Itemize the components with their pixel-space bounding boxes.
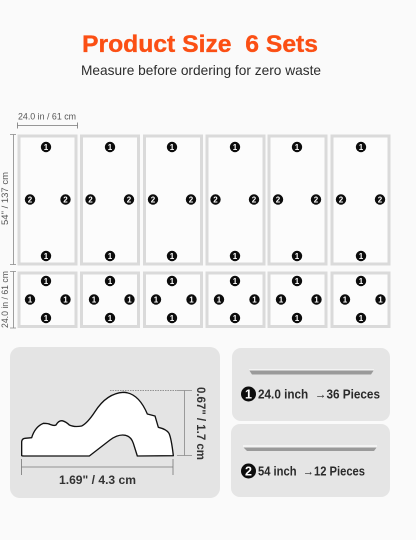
tall frame badges: 1 xyxy=(170,143,175,152)
short frame badges: 1 xyxy=(28,295,33,304)
tall frame badges: 1 xyxy=(295,252,300,261)
short frames row xyxy=(19,273,389,326)
tall frame badges: 2 xyxy=(127,195,132,204)
short frame badges: 1 xyxy=(63,295,68,304)
width dimension: 24.0 in / 61 cm xyxy=(18,112,78,128)
tall frame badges: 2 xyxy=(213,195,218,204)
short frame badges: 1 xyxy=(170,277,175,286)
short frame badges: 1 xyxy=(44,277,49,286)
tall frame badges: 2 xyxy=(28,195,33,204)
moulding strip xyxy=(249,370,374,374)
panel: 24.0 inch pieces xyxy=(232,348,390,421)
short frame badges: 1 xyxy=(108,314,113,323)
short frame badges: 1 xyxy=(279,295,284,304)
moulding profile shape xyxy=(22,392,173,456)
width dimension: 24.0 in / 61 cm: 24.0 in / 61 cm xyxy=(18,112,76,122)
tall frame badges: 1 xyxy=(44,252,49,261)
short frame badges: 1 xyxy=(189,295,194,304)
tall frame badges: 2 xyxy=(276,195,281,204)
panel: cross-section profile xyxy=(10,347,220,498)
height dimension: 54 in / 137 cm xyxy=(0,134,16,264)
short frame badges: 1 xyxy=(233,277,238,286)
tall frame badges: 1 xyxy=(295,143,300,152)
tall frame badges: 1 xyxy=(359,252,364,261)
short frame badges: 1 xyxy=(378,295,383,304)
tall frame badges: 2 xyxy=(151,195,156,204)
tall frame badges: 1 xyxy=(170,252,175,261)
height dimension: 24 in / 61 cm: 24.0 in / 61 cm xyxy=(0,271,11,328)
short frame badges: 1 xyxy=(295,314,300,323)
height dimension: 24 in / 61 cm xyxy=(0,271,16,328)
tall frame badges: 1 xyxy=(359,143,364,152)
short frame badges: 1 xyxy=(170,314,175,323)
tall frame badges xyxy=(25,142,385,261)
height measure xyxy=(110,387,208,460)
tall frame badges: 2 xyxy=(88,195,93,204)
badge 1: 1 xyxy=(245,388,252,402)
tall frame badges: 2 xyxy=(339,195,344,204)
short frame badges: 1 xyxy=(252,295,257,304)
label: 54 inch →12 Pieces xyxy=(258,464,365,478)
short frame badges: 1 xyxy=(295,277,300,286)
width measure xyxy=(22,459,173,487)
tall frame badges: 2 xyxy=(252,195,257,204)
short frame badges: 1 xyxy=(92,295,97,304)
tall frames row xyxy=(19,136,389,264)
tall frame badges: 1 xyxy=(108,143,113,152)
short frame badges: 1 xyxy=(359,277,364,286)
short frame badges xyxy=(25,276,386,323)
short frame badges: 1 xyxy=(154,295,159,304)
height measure: 0.67" / 1.7 cm xyxy=(194,387,208,460)
short frame badges: 1 xyxy=(343,295,348,304)
tall frame badges: 2 xyxy=(189,195,194,204)
short frame badges: 1 xyxy=(108,277,113,286)
badge 1 xyxy=(241,386,256,402)
short frame badges: 1 xyxy=(44,314,49,323)
tall frame badges: 2 xyxy=(314,195,319,204)
tall frame badges: 1 xyxy=(108,252,113,261)
subtitle: Measure before ordering for zero waste xyxy=(81,62,321,78)
title: Product Size 6 Sets xyxy=(82,31,318,58)
tall frame badges: 2 xyxy=(63,195,68,204)
short frame badges: 1 xyxy=(127,295,132,304)
tall frame badges: 2 xyxy=(378,195,383,204)
tall frame badges: 1 xyxy=(44,143,49,152)
tall frame badges: 1 xyxy=(233,143,238,152)
badge 2: 2 xyxy=(245,464,252,478)
short frame badges: 1 xyxy=(233,314,238,323)
tall frame badges: 1 xyxy=(233,252,238,261)
short frame badges: 1 xyxy=(359,314,364,323)
height dimension: 54 in / 137 cm: 54" / 137 cm xyxy=(0,172,11,225)
panel: 54 inch pieces xyxy=(231,424,390,497)
short frame badges: 1 xyxy=(314,295,319,304)
width measure: 1.69" / 4.3 cm xyxy=(59,473,136,487)
moulding strip xyxy=(243,447,377,451)
label: 24.0 inch →36 Pieces xyxy=(258,388,380,402)
short frame badges: 1 xyxy=(217,295,222,304)
badge 2 xyxy=(241,464,256,478)
